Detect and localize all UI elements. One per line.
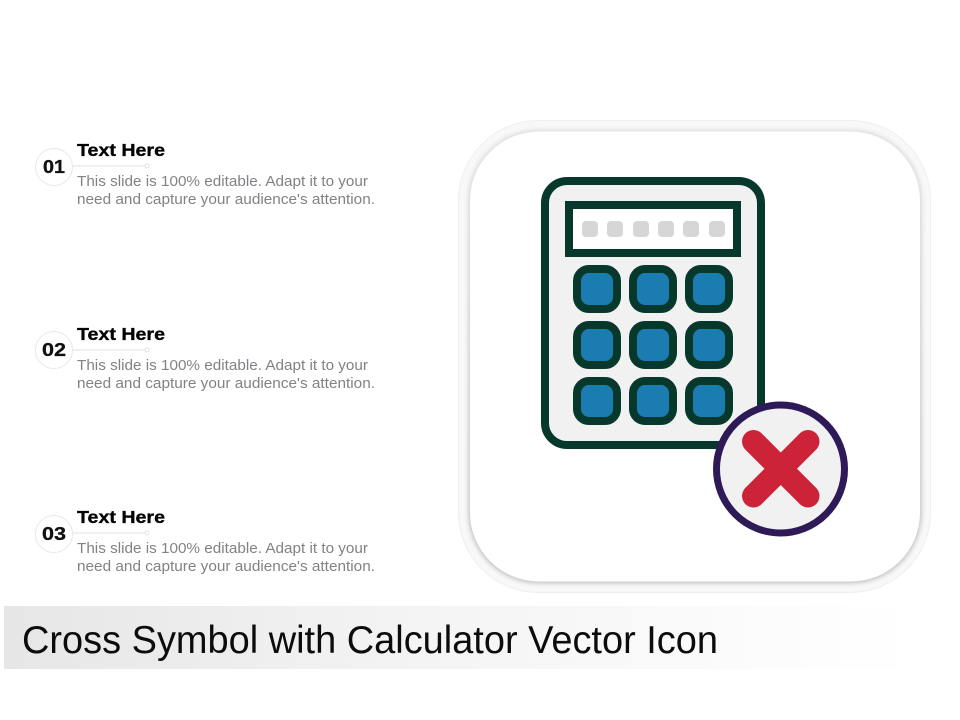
- body text: This slide is 100% editable. Adapt it to your: [77, 174, 368, 190]
- number badge 03: 03: [42, 524, 66, 544]
- heading: Text Here: [77, 140, 165, 160]
- calculator body: [545, 181, 761, 445]
- icon: cross symbol badge: [716, 405, 844, 533]
- title band: [4, 606, 914, 669]
- body text: need and capture your audience's attention.: [77, 376, 375, 392]
- number badge 02: 02: [42, 340, 66, 360]
- number badge 01: [36, 148, 72, 186]
- body text: [77, 358, 375, 392]
- connector line: [73, 531, 149, 535]
- number badge 03: [36, 516, 72, 552]
- heading: Text Here: [77, 324, 165, 344]
- connector line: [73, 164, 149, 168]
- number badge 01: 01: [43, 157, 65, 177]
- heading: Text Here: [77, 507, 165, 527]
- calculator display: [569, 205, 737, 253]
- body text: need and capture your audience's attention.: [77, 559, 375, 575]
- body text: [77, 174, 375, 208]
- body text: This slide is 100% editable. Adapt it to your: [77, 358, 368, 374]
- number badge 02: [36, 332, 72, 368]
- title: Cross Symbol with Calculator Vector Icon: [22, 619, 718, 662]
- panel: item 02: [36, 324, 375, 392]
- body text: This slide is 100% editable. Adapt it to your: [77, 541, 368, 557]
- body text: [77, 541, 375, 575]
- calculator keys: [577, 269, 729, 421]
- icon: calculator: [545, 181, 761, 445]
- panel: item 01: [36, 140, 375, 208]
- panel: rounded icon frame: [458, 120, 930, 592]
- connector line: [73, 348, 149, 352]
- panel: item 03: [36, 507, 375, 575]
- body text: need and capture your audience's attention.: [77, 192, 375, 208]
